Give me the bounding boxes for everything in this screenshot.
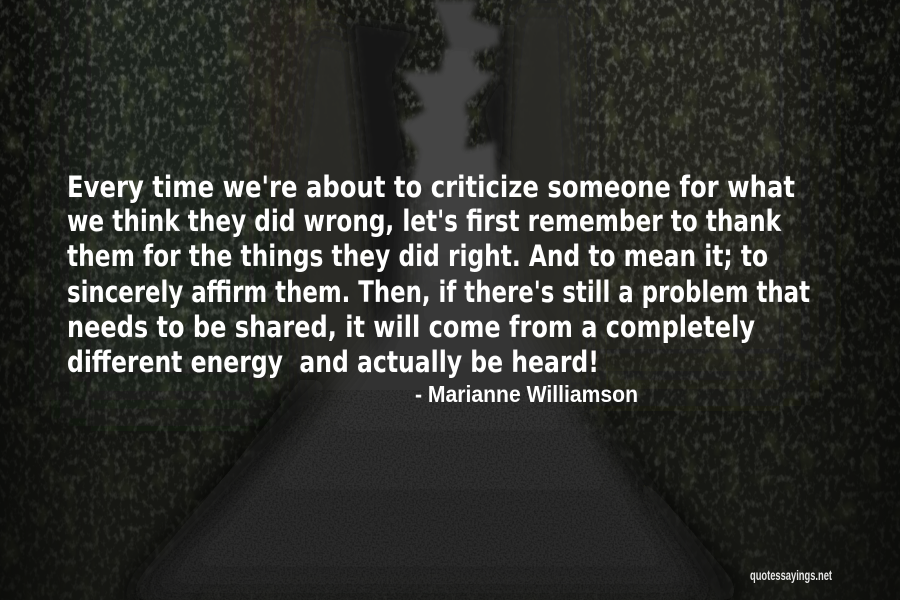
watermark: quotessayings.net <box>750 567 832 583</box>
quote line 6: different energy and actually be heard! <box>67 345 599 379</box>
distant path lumps <box>400 0 500 185</box>
attribution: - Marianne Williamson <box>415 381 638 407</box>
dark shadow beside path <box>350 20 510 420</box>
quote line 5: needs to be shared, it will come from a completely <box>67 310 755 344</box>
brown trunk stripe on left hedge <box>245 0 330 190</box>
dark shadow at base of hedges <box>120 370 750 600</box>
hedge tone <box>60 0 810 400</box>
gravel grain <box>141 390 719 600</box>
path surface <box>130 170 715 600</box>
quote <box>67 170 810 379</box>
smooth inner hedge faces <box>285 0 590 420</box>
